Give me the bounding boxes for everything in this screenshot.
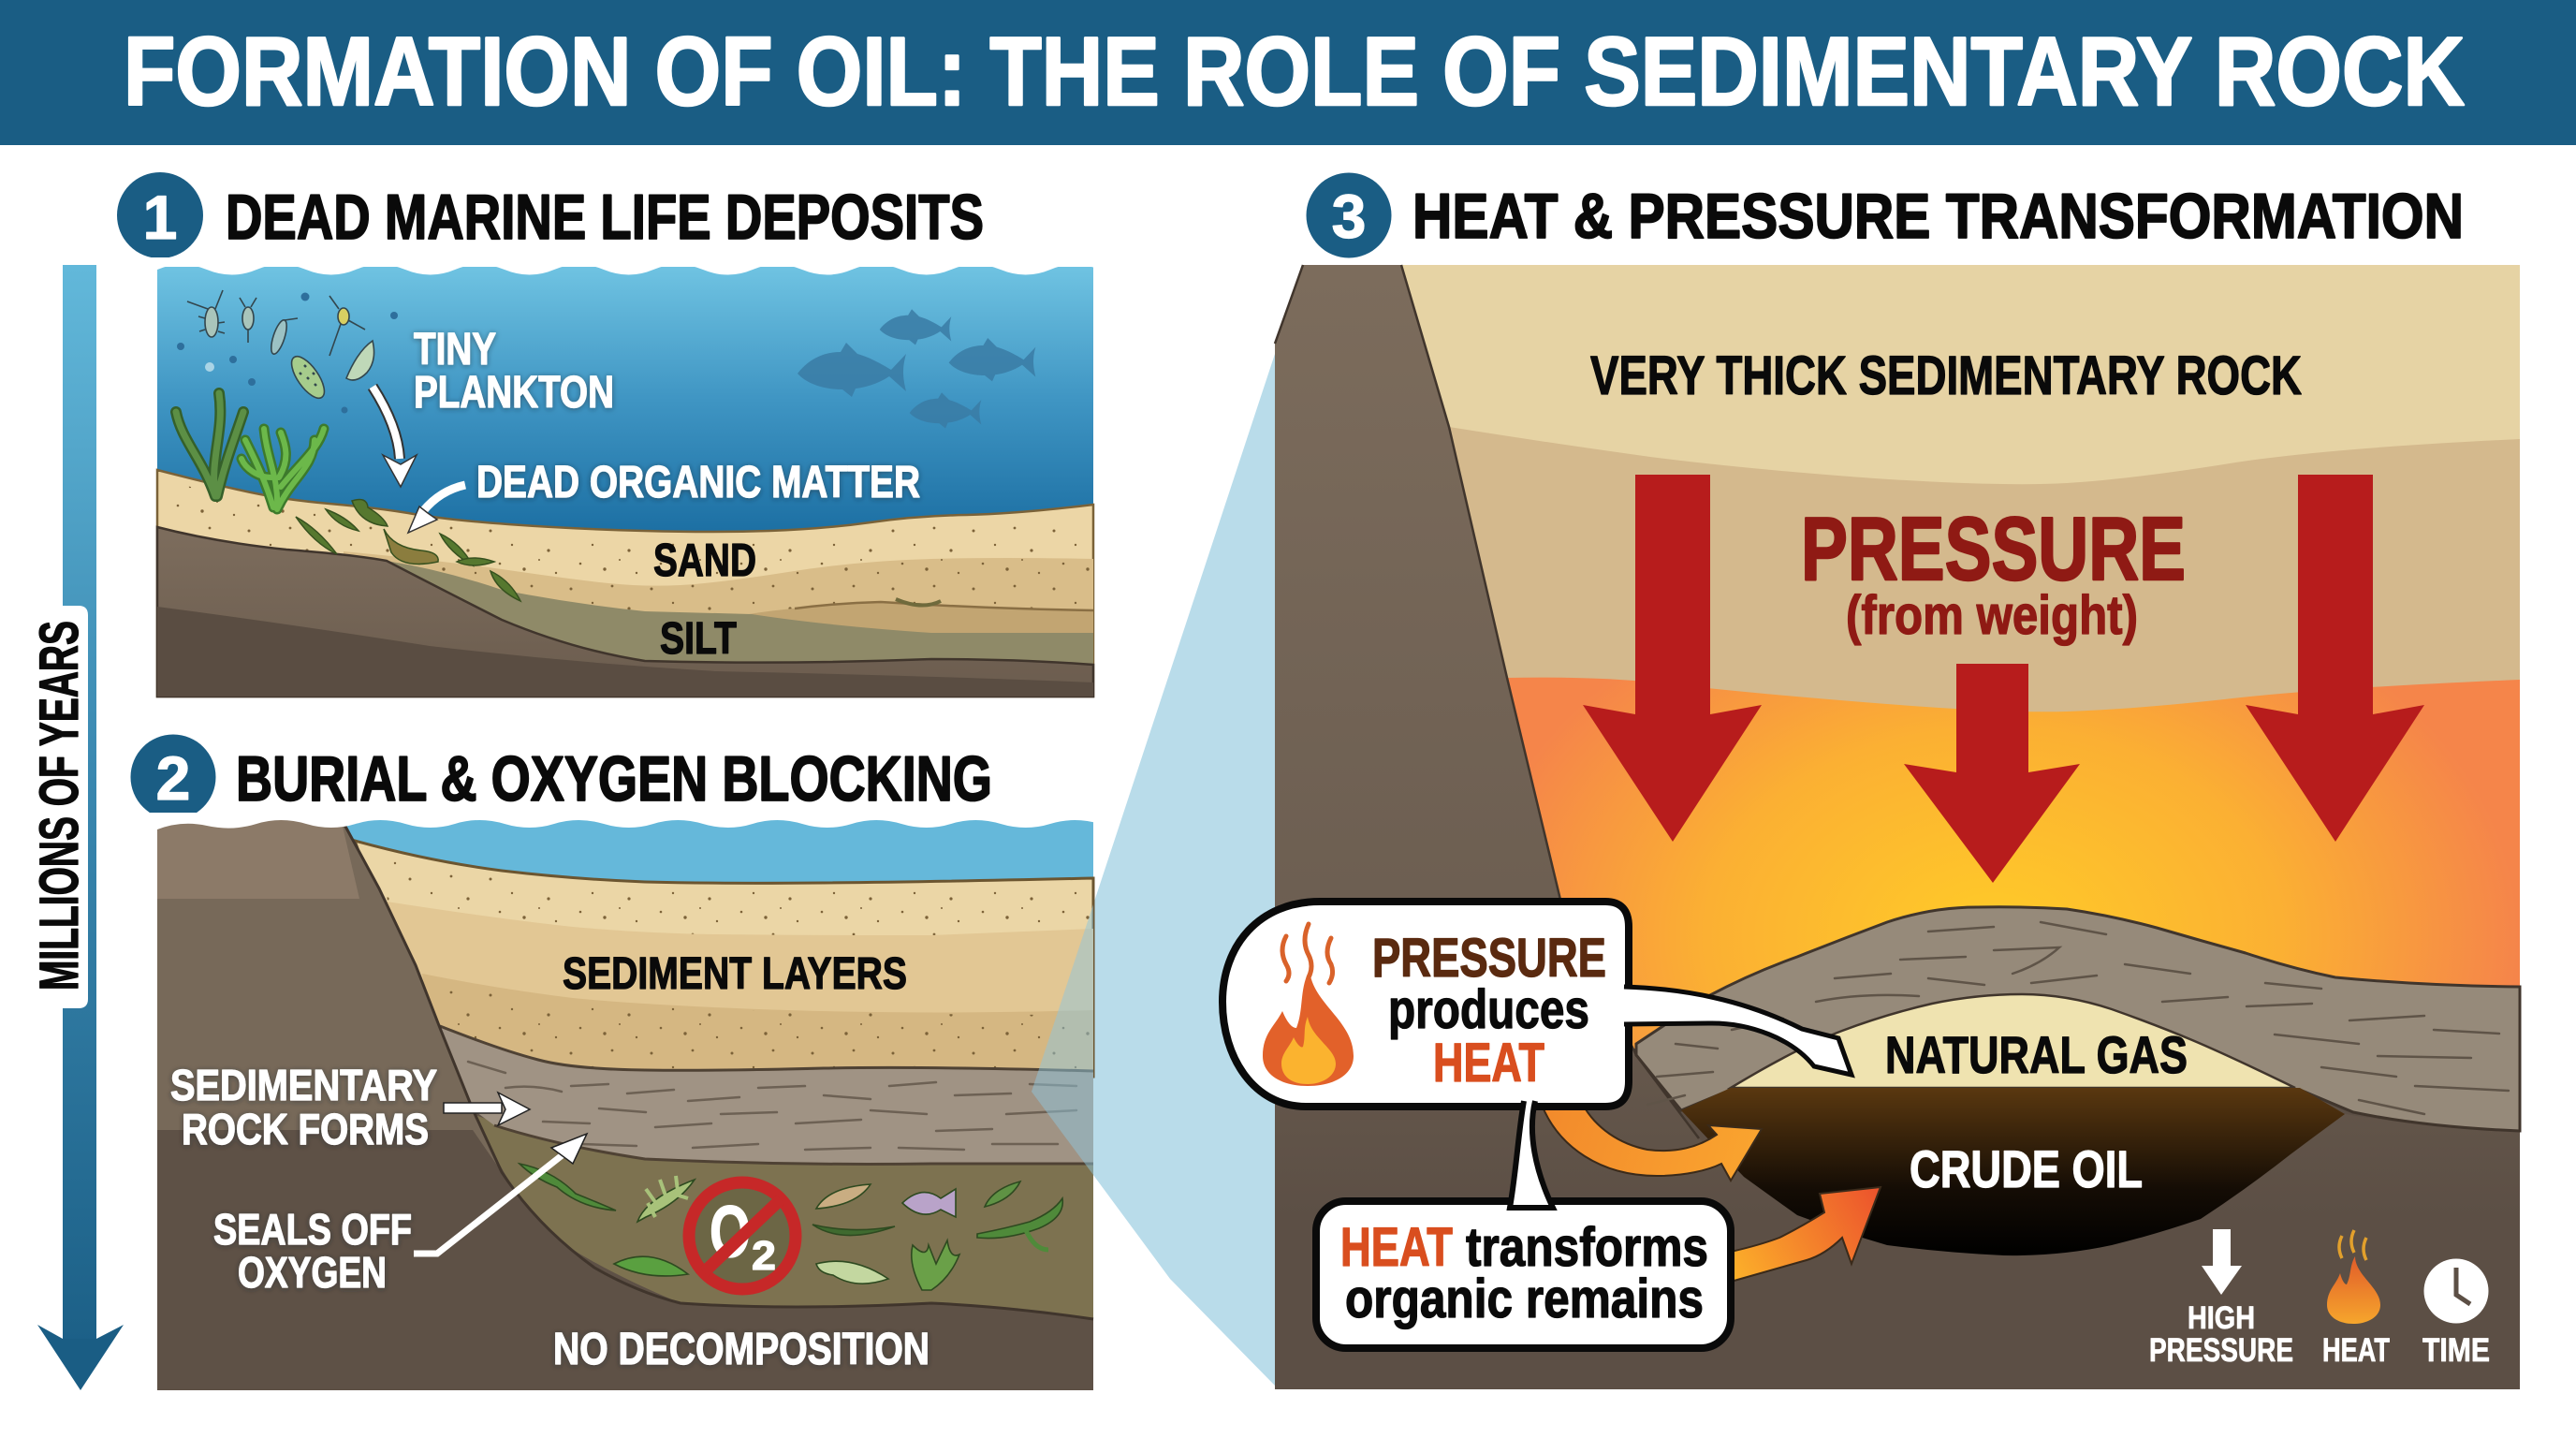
pressure arrows [1583, 475, 2424, 883]
section 2 heading: 2 [156, 743, 190, 813]
labels: DEAD ORGANIC MATTER [476, 458, 920, 507]
panel 2: burial and oxygen blocking: ROCK FORMS [182, 1105, 429, 1153]
callout: pressure produces heat [1222, 902, 1629, 1107]
title banner [0, 0, 2576, 145]
labels [414, 325, 920, 507]
dead organic matter [296, 500, 520, 601]
panel 1: dead marine life deposits [150, 257, 1100, 697]
no oxygen symbol [689, 1182, 796, 1289]
natural gas pocket [1731, 994, 2295, 1088]
cap rock dome [1636, 907, 2520, 1131]
panel 1: dead marine life deposits: SAND [653, 536, 756, 586]
timeline label: MILLIONS OF YEARS [29, 621, 90, 990]
panel 3: heat and pressure transformation: (from weight) [1846, 585, 2138, 646]
panel 2: burial and oxygen blocking: OXYGEN [238, 1248, 387, 1297]
bedrock and left cliff [1275, 265, 2520, 1389]
panel 3: heat and pressure transformation [1222, 265, 2520, 1389]
legend: heat: HEAT [2322, 1332, 2390, 1369]
section 2 heading [131, 734, 992, 820]
no oxygen symbol: O [710, 1190, 751, 1272]
mid sediment [1442, 427, 2520, 749]
orange arrow: into oil from heat callout [1731, 1187, 1881, 1282]
section 2 heading: BURIAL & OXYGEN BLOCKING [236, 743, 992, 814]
no oxygen symbol: 2 [752, 1233, 776, 1279]
legend: high pressure [2149, 1229, 2293, 1369]
crude oil pocket [1681, 1088, 2345, 1255]
labels: TINY [414, 325, 496, 374]
panel 1 wave edge [150, 257, 1100, 275]
seaweed [176, 393, 324, 509]
callout: heat transforms organic remains: transforms [1466, 1217, 1708, 1278]
arrow: sedimentary rock forms [444, 1093, 530, 1125]
panel 3: heat and pressure transformation: CRUDE OIL [1910, 1139, 2143, 1198]
fossil organic remains [520, 1164, 1062, 1290]
panel 1: dead marine life deposits: SILT [660, 614, 737, 664]
legend: high pressure: PRESSURE [2149, 1332, 2293, 1369]
panel 2 wave edge [150, 813, 1100, 829]
arrow: seals off oxygen [414, 1134, 587, 1254]
labels: VERY THICK SEDIMENTARY ROCK [1590, 345, 2302, 406]
panel 3: heat and pressure transformation: PRESSURE [1801, 499, 2186, 599]
zoom beam connecting panel 2 to panel 3 [1032, 354, 1275, 1386]
arrow: dead organic matter [408, 485, 465, 533]
callout: heat transforms organic remains [1316, 1201, 1731, 1348]
sedimentary rock band [440, 1026, 1093, 1164]
panel 2: burial and oxygen blocking: NO DECOMPOSITION [553, 1325, 929, 1374]
bedrock [157, 527, 1093, 697]
callout: heat transforms organic remains: HEAT [1340, 1217, 1453, 1278]
section 1 heading: DEAD MARINE LIFE DEPOSITS [226, 182, 984, 253]
plankton dots [177, 292, 398, 414]
callout connector [1510, 1101, 1553, 1208]
callout: pressure produces heat: produces [1388, 979, 1589, 1040]
callout: heat transforms organic remains: organic remains [1345, 1269, 1704, 1329]
fish [798, 309, 1035, 428]
trapped organic layer [473, 1114, 1093, 1319]
orange arrow: into oil from pressure callout [1542, 1105, 1762, 1181]
icon: flame [1263, 924, 1354, 1086]
timeline arrow: millions of years [28, 265, 124, 1390]
arrow: plankton sinks [373, 387, 417, 487]
sediment layers [355, 841, 1093, 1077]
plankton [187, 290, 374, 404]
panel 2: burial and oxygen blocking [150, 813, 1100, 1390]
panel 3: heat and pressure transformation: NATURAL GAS [1885, 1025, 2188, 1084]
legend: time [2422, 1258, 2490, 1369]
legend: heat [2322, 1230, 2390, 1369]
zoom beam overlay [1032, 904, 1093, 1175]
heat zone [1507, 678, 2520, 1049]
callout: pressure produces heat: PRESSURE [1372, 928, 1606, 989]
legend: high pressure: HIGH [2188, 1300, 2255, 1336]
callout: pressure produces heat: HEAT [1433, 1033, 1544, 1093]
panel 2: burial and oxygen blocking: SEALS OFF [213, 1205, 412, 1254]
left bedrock cliff [157, 818, 537, 1311]
sand layer [157, 470, 1093, 697]
legend: time: TIME [2422, 1332, 2490, 1369]
panel 2: burial and oxygen blocking: SEDIMENTARY [170, 1061, 437, 1109]
arrow: callout to natural gas [1624, 987, 1852, 1075]
labels: PLANKTON [414, 368, 614, 418]
labels: SEDIMENT LAYERS [563, 949, 907, 999]
section 1 heading [117, 172, 984, 258]
section 1 heading: 1 [143, 183, 177, 252]
section 3 heading: 3 [1332, 182, 1366, 251]
silt layer [387, 561, 1093, 674]
